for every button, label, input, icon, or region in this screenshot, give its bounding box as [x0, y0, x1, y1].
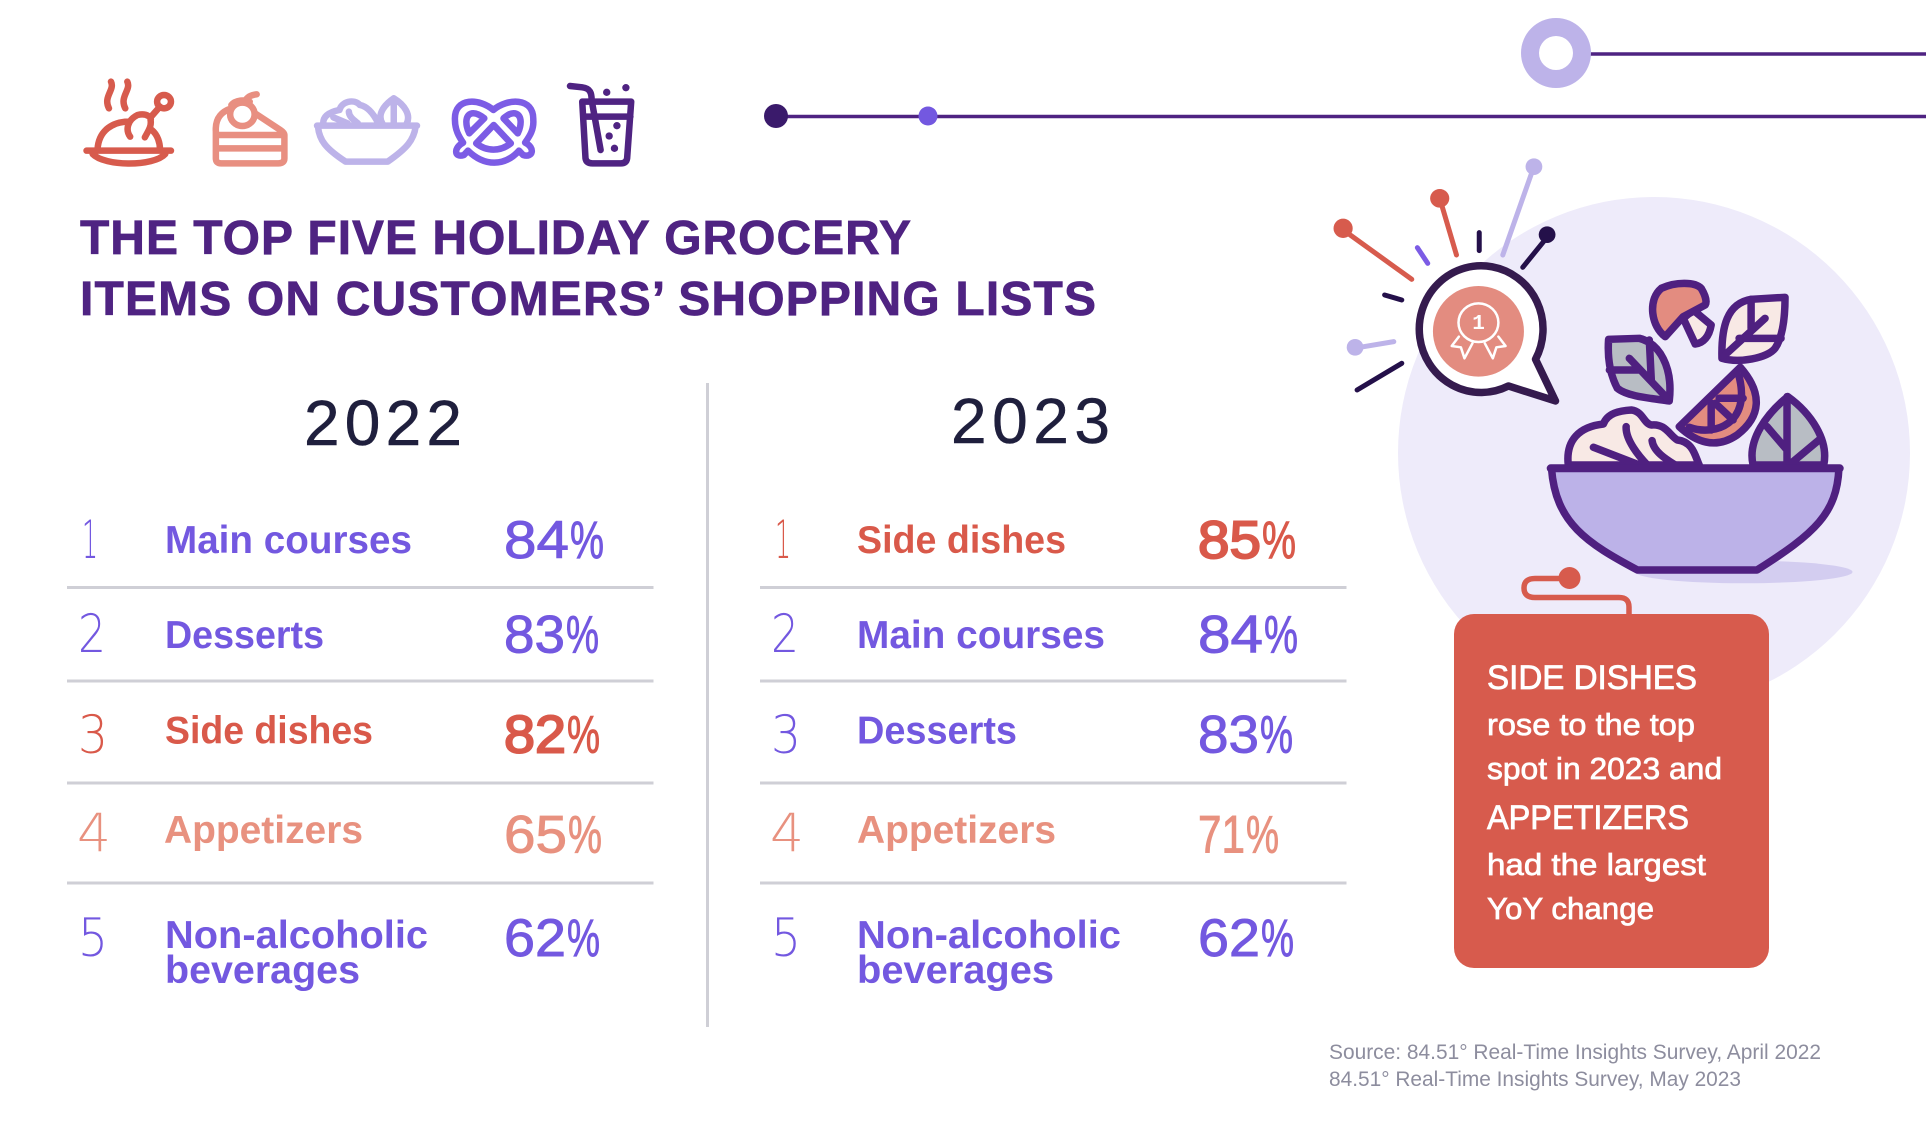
background circle — [1398, 197, 1910, 709]
row 5 2022 — [78, 908, 600, 992]
row 5 2022: 5 — [78, 908, 108, 969]
callout box — [1454, 614, 1769, 968]
row 2 2022: % — [566, 606, 599, 664]
source note — [1329, 1041, 1821, 1091]
row 5 2022: beverages — [165, 949, 360, 992]
panel: 2023 ranking — [760, 385, 1346, 992]
row 3 2022: % — [567, 706, 600, 764]
year heading 2022: 2022 — [304, 387, 462, 459]
row 2 2023: Main courses — [857, 614, 1105, 657]
source note: 84.51° Real-Time Insights Survey, May 2023 — [1329, 1068, 1741, 1091]
panel: 2022 ranking — [67, 387, 654, 992]
row 3 2022: 82 — [504, 706, 566, 764]
row 1 2023 — [775, 510, 1296, 571]
speech bubble — [1419, 266, 1555, 401]
row 3 2023: 3 — [771, 705, 801, 766]
row 2 2022: Desserts — [165, 614, 324, 657]
row 1 2023: 1 — [775, 510, 791, 571]
row 5 2022: 62 — [504, 909, 566, 968]
bowl — [1551, 468, 1839, 570]
row 4 2022: Appetizers — [164, 809, 363, 852]
icon: drink with straw — [570, 84, 631, 163]
row 3 2022: 3 — [78, 705, 108, 766]
row 3 2023 — [771, 705, 1293, 766]
row 1 2022: 1 — [82, 510, 98, 571]
row 5 2023: Non-alcoholic — [857, 914, 1121, 957]
illustration: award bubble and salad — [1334, 158, 1852, 583]
row 1 2023: 85 — [1198, 511, 1261, 570]
icon: roast turkey — [87, 82, 171, 163]
callout text — [1487, 659, 1722, 926]
decorative top timeline ring — [1521, 18, 1926, 88]
callout connector — [1524, 567, 1629, 616]
row 3 2023: 83 — [1198, 706, 1259, 764]
bowl rim — [1551, 464, 1840, 472]
row 4 2022: 4 — [77, 803, 111, 864]
row 4 2023: Appetizers — [857, 809, 1056, 852]
callout text: rose to the top — [1487, 707, 1695, 742]
row 1 2023: Side dishes — [857, 519, 1066, 562]
medal number: 1 — [1472, 313, 1485, 336]
row 4 2023: 71 — [1198, 806, 1245, 864]
row 1 2023: % — [1262, 511, 1296, 570]
row 2 2023: 84 — [1198, 606, 1263, 664]
row dividers 2023 — [760, 588, 1346, 883]
row 5 2023 — [771, 908, 1294, 992]
row 5 2023: % — [1261, 909, 1294, 968]
title — [80, 212, 1096, 326]
row 2 2023 — [771, 604, 1298, 665]
pink leaf — [1722, 297, 1785, 360]
row 5 2022: % — [567, 909, 600, 968]
title: ITEMS ON CUSTOMERS’ SHOPPING LISTS — [80, 273, 1096, 326]
icon row — [87, 82, 631, 163]
callout text: APPETIZERS — [1487, 799, 1689, 837]
icon: salad bowl — [317, 98, 417, 162]
award badge — [1433, 286, 1524, 377]
year heading 2023: 2023 — [951, 385, 1110, 457]
row 5 2022: Non-alcoholic — [165, 914, 428, 957]
row 3 2022: Side dishes — [165, 710, 373, 752]
burst rays — [1334, 158, 1555, 390]
row 2 2023: % — [1264, 606, 1298, 664]
row 5 2023: 5 — [771, 908, 801, 969]
row 5 2023: 62 — [1198, 909, 1260, 968]
row 2 2022: 2 — [78, 604, 106, 665]
row 1 2022 — [82, 510, 604, 571]
bowl shadow — [1635, 561, 1852, 583]
row 3 2023: Desserts — [857, 710, 1017, 752]
row 2 2022 — [78, 604, 599, 665]
row 4 2022: 65 — [504, 806, 567, 864]
decorative timeline with dots — [764, 104, 1926, 128]
title: THE TOP FIVE HOLIDAY GROCERY — [80, 212, 911, 265]
callout text: SIDE DISHES — [1487, 659, 1697, 697]
row 3 2023: % — [1260, 706, 1293, 764]
icon: pretzel — [455, 102, 533, 163]
row 4 2023: 4 — [770, 803, 804, 864]
row 2 2022: 83 — [504, 606, 565, 664]
row 3 2022 — [78, 705, 600, 766]
row 2 2023: 2 — [771, 604, 799, 665]
grey leaf — [1608, 338, 1670, 401]
row 1 2022: Main courses — [165, 519, 412, 562]
row 4 2022: % — [568, 806, 602, 864]
lettuce — [1568, 410, 1699, 465]
callout text: YoY change — [1487, 891, 1654, 926]
row 5 2023: beverages — [857, 949, 1054, 992]
callout text: had the largest — [1487, 847, 1706, 882]
icon: cake slice — [216, 94, 284, 163]
mushroom — [1653, 283, 1711, 344]
row 4 2023 — [770, 803, 1279, 864]
row 4 2022 — [77, 803, 602, 864]
callout text: spot in 2023 and — [1487, 751, 1722, 786]
row 4 2023: % — [1246, 806, 1279, 864]
source note: Source: 84.51° Real-Time Insights Survey, April 2022 — [1329, 1041, 1821, 1064]
row dividers 2022 — [67, 588, 654, 883]
orange wedge — [1679, 367, 1756, 443]
column divider — [706, 383, 709, 1027]
row 1 2022: % — [570, 511, 604, 570]
row 1 2022: 84 — [504, 511, 569, 570]
spinach leaf in bowl — [1752, 397, 1825, 465]
